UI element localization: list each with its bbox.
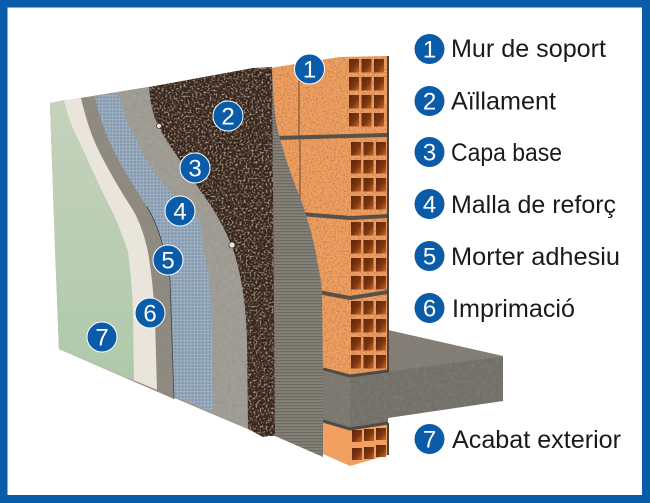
legend item 3 [414, 137, 562, 167]
marker 7 [87, 322, 117, 352]
marker 2 [213, 101, 243, 131]
mesh edge line [147, 207, 174, 399]
layer 6: primer [50, 98, 157, 390]
marker 5: 5 [161, 248, 175, 274]
legend [414, 34, 621, 454]
layer 4: reinforcement mesh [50, 92, 213, 412]
marker 2: 2 [221, 104, 235, 130]
legend item 7: Acabat exterior [452, 426, 621, 454]
marker 6: 6 [143, 300, 157, 328]
number markers on illustration [87, 54, 324, 352]
legend item 2 [414, 86, 556, 116]
marker 3: 3 [188, 156, 202, 182]
legend item 5: 5 [423, 244, 436, 270]
marker 3 [180, 153, 210, 183]
legend item 1: Mur de soport [451, 35, 606, 63]
legend item 3: 3 [423, 140, 436, 166]
legend item 1: 1 [423, 36, 436, 64]
layer 1: brick support wall [270, 56, 388, 466]
fixing plugs [156, 124, 235, 248]
marker 1: 1 [303, 56, 316, 84]
concrete slab [320, 330, 503, 429]
legend item 3: Capa base [451, 139, 562, 167]
legend item 4: 4 [423, 192, 436, 218]
layer 7: exterior finish [50, 100, 134, 381]
layer 3: base coat [50, 87, 248, 429]
marker 7: 7 [95, 324, 109, 352]
marker 6 [135, 298, 165, 328]
legend item 6: 6 [423, 296, 436, 322]
layer 2: insulation [50, 67, 275, 437]
legend item 2: Aïllament [451, 88, 556, 116]
legend item 5: Morter adhesiu [451, 243, 620, 271]
base mortar on brick [270, 68, 323, 457]
marker 4: 4 [173, 198, 187, 226]
marker 4 [165, 196, 195, 226]
illustration: wall cross-section [50, 56, 503, 466]
layer 5: adhesive mortar [50, 97, 174, 399]
marker 1 [294, 54, 324, 84]
legend item 2: 2 [423, 88, 436, 116]
legend item 6: Imprimació [452, 295, 575, 323]
legend item 7: 7 [423, 426, 436, 454]
legend item 4: Malla de reforç [451, 191, 616, 219]
marker 5 [153, 245, 183, 275]
